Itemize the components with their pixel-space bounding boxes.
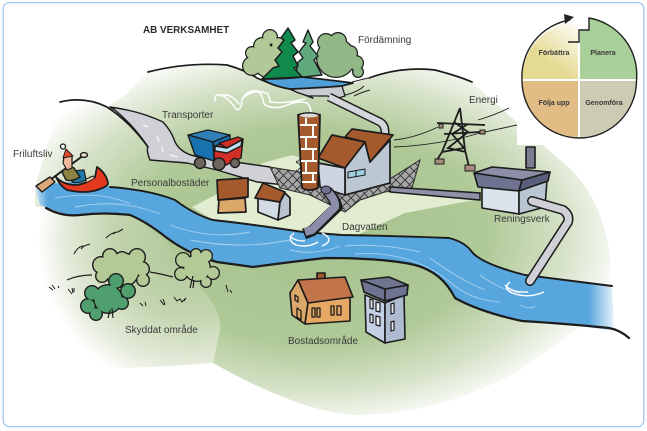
apartment building: [361, 277, 408, 343]
trees in protected area: [49, 229, 232, 321]
outflow pipe: [530, 201, 568, 281]
label: Transporter: Transporter: [162, 110, 214, 121]
spruce medium: [295, 30, 322, 78]
chimney: [298, 113, 320, 190]
label: Genomföra: Genomföra: [585, 100, 623, 107]
road markings: [143, 125, 178, 157]
label: Förbättra: Förbättra: [539, 50, 569, 57]
label: Reningsverk: Reningsverk: [494, 214, 551, 225]
quadrant: Planera: [580, 18, 636, 79]
road: [110, 107, 285, 185]
label: Följa upp: Följa upp: [538, 100, 570, 107]
scaffolding: [270, 155, 420, 212]
dam wall: [290, 86, 345, 100]
landscape ground: [35, 64, 610, 415]
power lines: [394, 108, 517, 147]
label: Dagvatten: Dagvatten: [342, 222, 388, 233]
water rings: [290, 233, 544, 296]
arrow head: [564, 14, 574, 24]
label: Personalbostäder: Personalbostäder: [131, 178, 210, 189]
quadrant: Genomföra: [580, 81, 636, 137]
pipe to treatment plant: [390, 187, 480, 200]
quadrant: Förbättra: [522, 22, 578, 79]
staff house 2: [255, 183, 290, 220]
quadrant: Följa upp: [522, 81, 578, 137]
PDCA circle: [517, 12, 641, 145]
factory: [318, 129, 393, 195]
tree light right: [174, 248, 220, 288]
hill outlines: [60, 64, 472, 147]
protected area ground: [10, 205, 220, 368]
grass tufts: [49, 285, 232, 306]
birds: [74, 229, 123, 254]
spruce dark: [262, 28, 302, 79]
tree dark: [80, 273, 136, 321]
label: Energi: Energi: [469, 95, 498, 106]
circle outline: [522, 18, 637, 138]
meadow around factory: [192, 155, 480, 236]
title: AB VERKSAMHET: [143, 25, 229, 36]
label: Bostadsområde: Bostadsområde: [288, 335, 358, 347]
dam and forest: [242, 28, 370, 100]
pond: [262, 77, 353, 89]
stormwater pipe: [304, 186, 337, 234]
round tree left: [242, 29, 287, 79]
pylon: [435, 108, 485, 171]
river: [35, 182, 629, 338]
penstock pipe: [329, 97, 385, 136]
tree light left: [92, 248, 150, 288]
truck: [188, 130, 243, 170]
label: Fördämning: Fördämning: [358, 35, 411, 46]
treatment plant: [474, 147, 550, 214]
label: Skyddat område: Skyddat område: [125, 324, 198, 336]
label: Planera: Planera: [590, 50, 616, 57]
round tree right: [316, 32, 364, 78]
residential house: [290, 273, 353, 324]
label: Friluftsliv: Friluftsliv: [13, 149, 52, 160]
staff house 1: [217, 178, 248, 213]
smoke: [215, 91, 311, 114]
kayaker: [36, 144, 108, 192]
paddle: [36, 153, 88, 192]
